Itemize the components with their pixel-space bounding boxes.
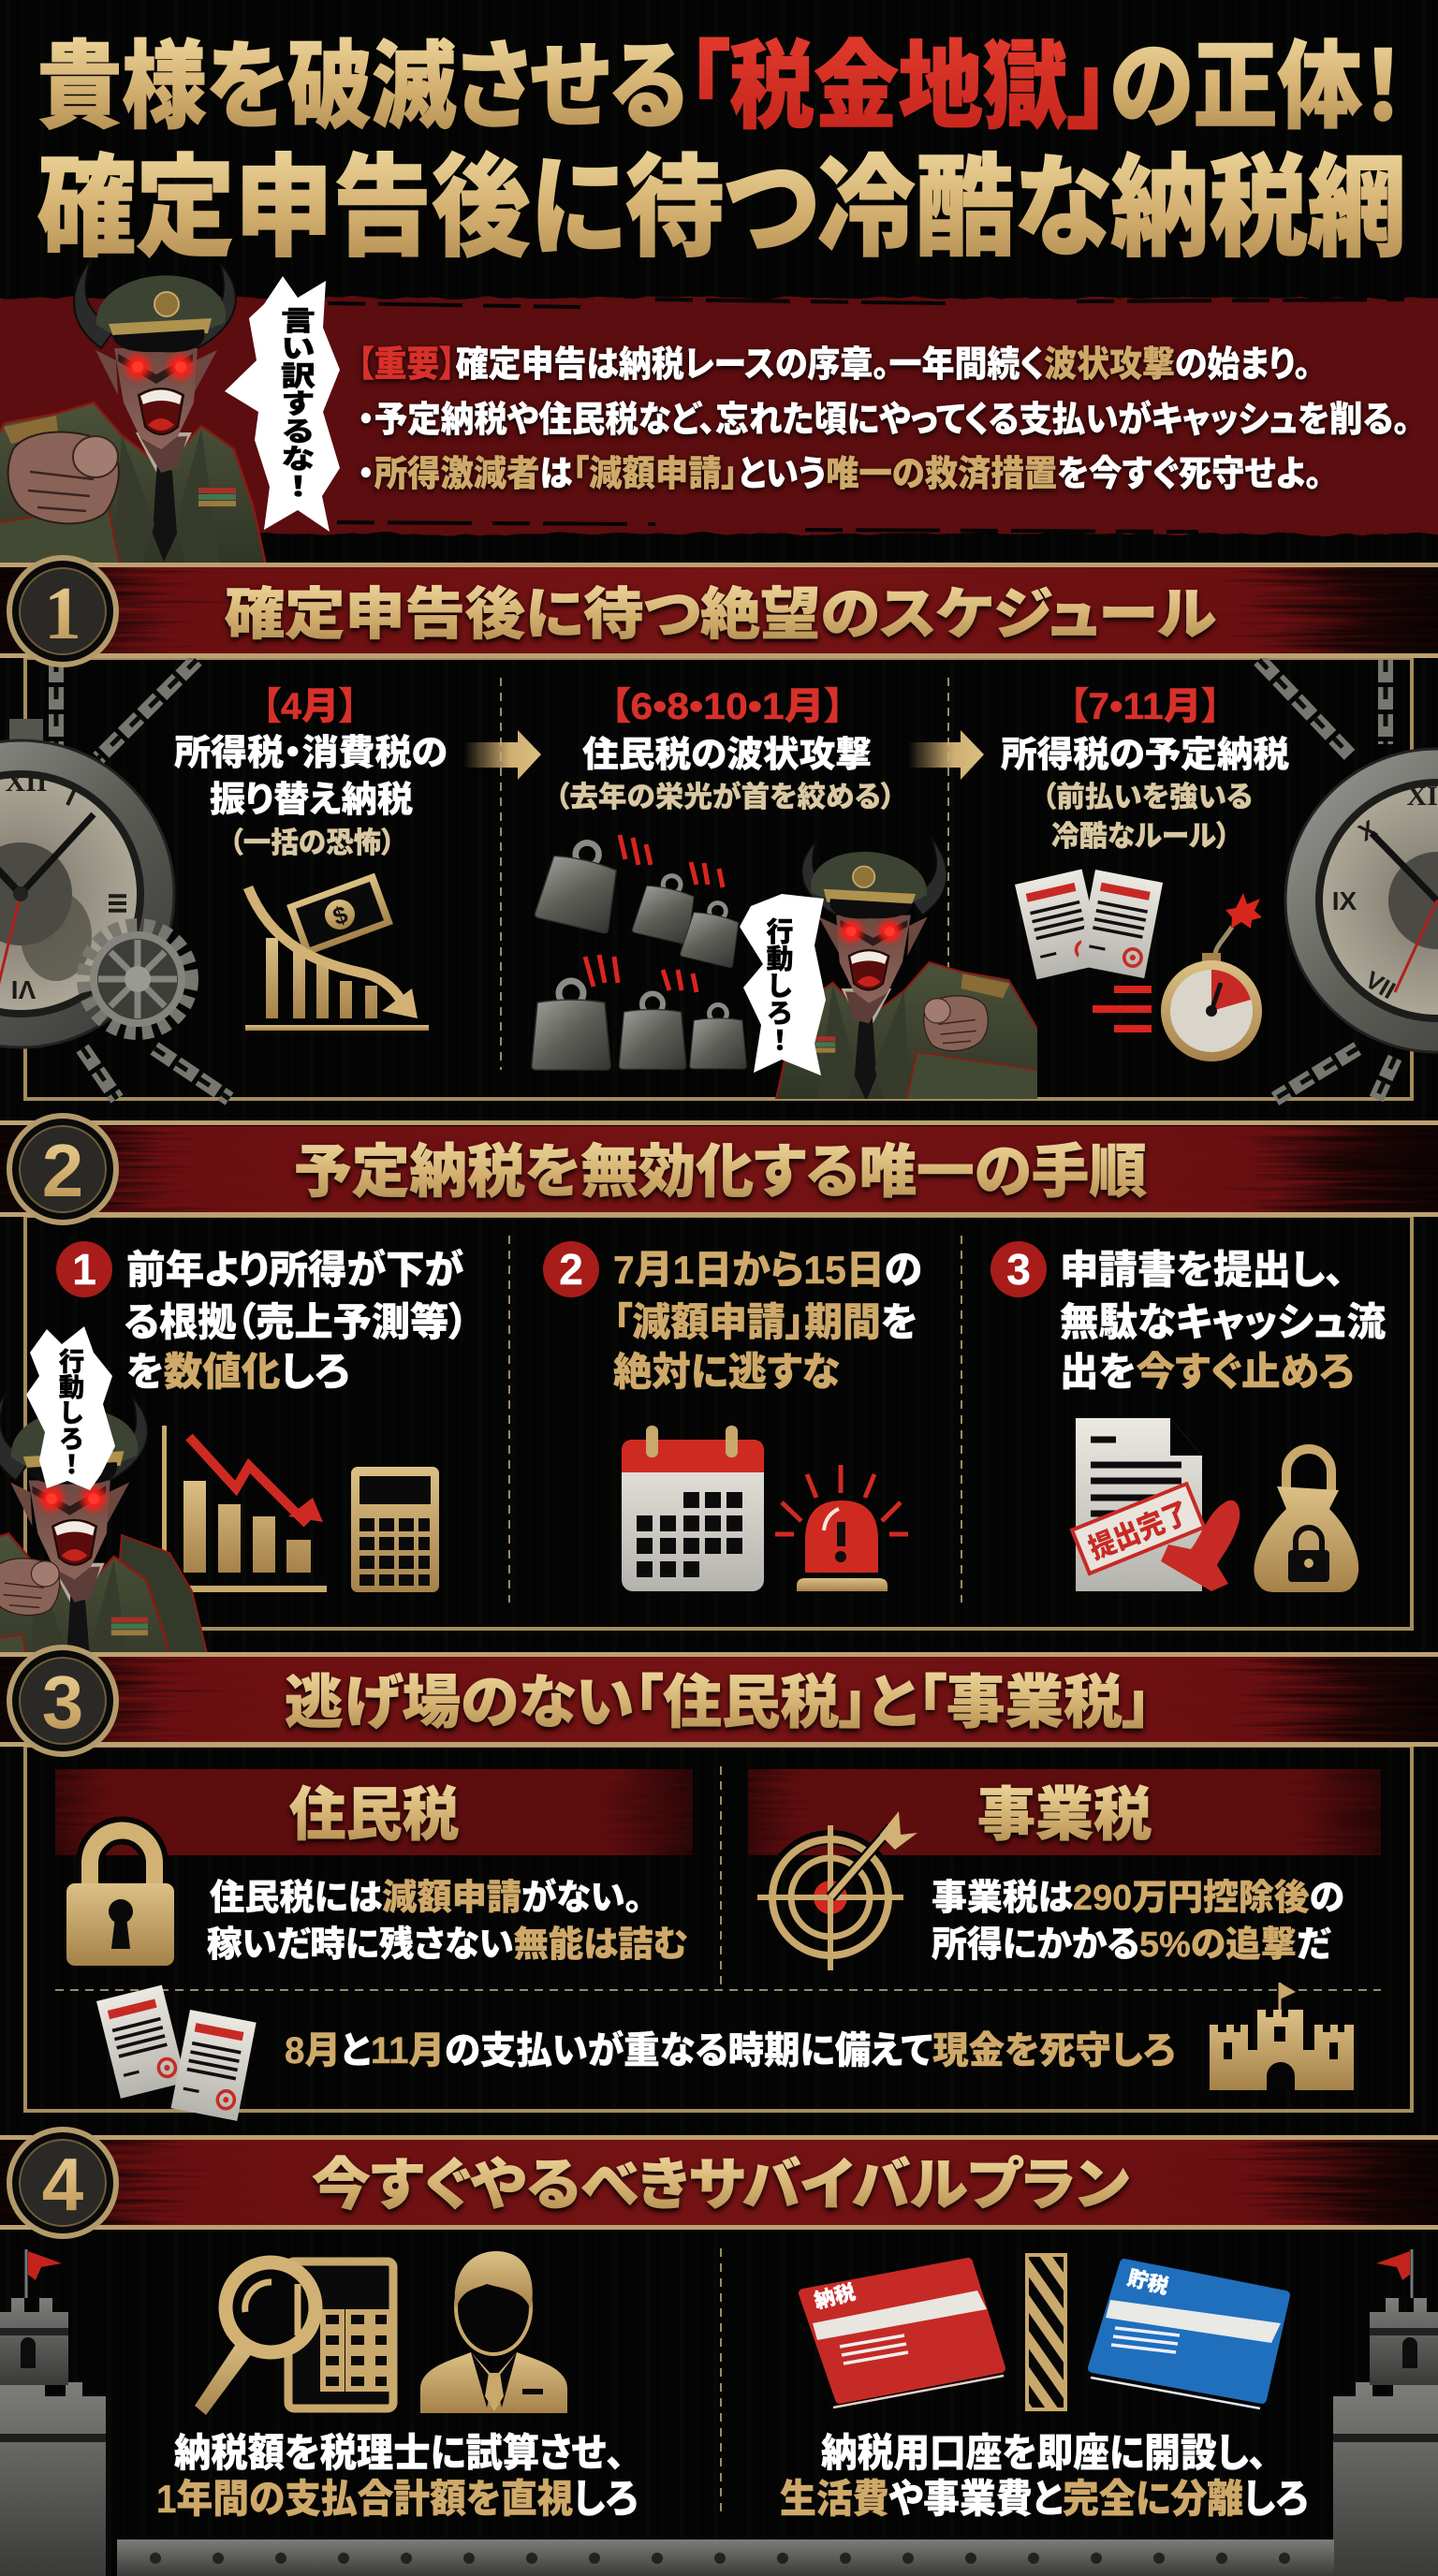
card: residence tax <box>42 1764 706 1966</box>
icon: castle <box>1210 1983 1354 2090</box>
illustration: right tower <box>1333 2249 1438 2576</box>
column: estimated tax: （前払いを強いる <box>1042 781 1253 813</box>
icon: locked money bag <box>1254 1449 1358 1592</box>
icon: tax documents <box>1015 869 1163 979</box>
card: residence tax: 稼いだ時に残さない無能は詰む <box>207 1925 688 1965</box>
speech bubble: 行動しろ left <box>26 1326 115 1490</box>
divider section 4 <box>720 2248 722 2516</box>
column: April lump sum: 【4月】 <box>262 686 358 727</box>
heading: 今すぐやるべきサバイバルプラン <box>312 2154 1129 2217</box>
icon: documents <box>96 1985 257 2121</box>
dividers section 3 <box>55 1766 1381 1990</box>
plan: separate tax account <box>780 2255 1308 2521</box>
section 1 header <box>0 558 1438 665</box>
step 1: る根拠（売上予測等） <box>124 1300 468 1344</box>
card: residence tax: 住民税には減額申請がない。 <box>210 1878 642 1918</box>
icon: bomb stopwatch <box>1093 893 1262 1061</box>
section 4 header <box>0 2130 1438 2236</box>
column: April lump sum <box>174 686 448 1031</box>
badge: number 2: 2 <box>42 1129 83 1212</box>
icon: red tax passbook <box>803 2262 1004 2408</box>
icon: submitted document with stamp <box>1072 1418 1240 1591</box>
icon: padlock <box>66 1831 174 1966</box>
panel: section 1 frame <box>25 658 1412 1099</box>
heading: 確定申告後に待つ絶望のスケジュール <box>225 583 1216 646</box>
card: business tax: 所得にかかる5%の追撃だ <box>932 1925 1331 1965</box>
icon: calendar <box>622 1426 764 1591</box>
text: intro lines <box>358 345 1410 494</box>
badge: number 1 <box>9 558 116 665</box>
badge: step 3: 3 <box>1006 1245 1031 1294</box>
base: riveted metal strip <box>117 2539 1334 2576</box>
card: business tax: 事業税は290万円控除後の <box>932 1879 1344 1918</box>
badge: number 3 <box>9 1647 116 1754</box>
illustration: left pocket watch with chains and gear <box>0 660 229 1099</box>
speech bubble: 言い訳するな: 言い訳するな！ <box>275 306 315 499</box>
panel: warning intro band <box>0 298 1438 534</box>
icon: siren <box>775 1465 908 1591</box>
icon: calculator <box>351 1467 439 1592</box>
step 1: を数値化しろ <box>126 1350 349 1394</box>
character: demon officer left <box>0 1392 208 1726</box>
step 3: 無駄なキャッシュ流 <box>1060 1300 1386 1344</box>
panel: section 2 frame <box>25 1216 1412 1629</box>
illustration: right pocket watch with chains: VII <box>1360 965 1401 1004</box>
text: intro lines: ・所得激減者は「減額申請」という唯一の救済措置を今すぐ死守せよ。 <box>358 455 1322 494</box>
arrow: step 2 to 3 <box>908 730 984 780</box>
badge: step 2 <box>543 1241 599 1297</box>
illustration: left pocket watch with chains and gear: XII <box>5 767 48 798</box>
column: April lump sum: （一括の恐怖） <box>229 827 395 859</box>
badge: number 4 <box>9 2130 116 2236</box>
illustration: left tower <box>0 2249 106 2576</box>
column: residence tax wave: 住民税の波状攻撃 <box>582 736 872 775</box>
icon: magnifier and calculator <box>195 2261 393 2415</box>
speech bubble: 言い訳するな <box>225 276 340 532</box>
section 4 towers <box>0 2249 1438 2576</box>
badge: step 1: 1 <box>72 1245 96 1294</box>
character: demon officer middle <box>769 837 1050 1134</box>
column: April lump sum: 振り替え納税 <box>210 781 413 820</box>
badge: number 4: 4 <box>42 2143 84 2226</box>
badge: number 1: 1 <box>44 573 81 655</box>
section 3 header <box>0 1647 1438 1754</box>
column: estimated tax: 【7•11月】 <box>1069 686 1221 727</box>
icon: red tax passbook: 納税 <box>812 2280 858 2313</box>
column: residence tax wave <box>532 686 895 1070</box>
illustration: right pocket watch with chains: X <box>1353 814 1382 847</box>
heading: 予定納税を無効化する唯一の手順 <box>294 1140 1147 1205</box>
icon: blue savings passbook <box>1091 2263 1285 2408</box>
badge: number 2 <box>9 1116 116 1222</box>
step 3 <box>990 1241 1386 1592</box>
icon: blue savings passbook: 貯税 <box>1125 2266 1171 2298</box>
step 2 <box>543 1241 922 1591</box>
step 1: 前年より所得が下が <box>126 1248 463 1292</box>
step 2: 「減額申請」期間を <box>613 1300 917 1344</box>
arrow: step 1 to 2 <box>463 730 541 780</box>
dividers section 1 <box>501 678 948 1070</box>
step 3: 申請書を提出し、 <box>1060 1248 1344 1292</box>
plan: accountant estimate: 納税額を税理士に試算させ、 <box>174 2431 624 2475</box>
step 3: 出を今すぐ止めろ <box>1060 1350 1354 1394</box>
title <box>37 34 1406 271</box>
illustration: right pocket watch with chains <box>1259 660 1438 1099</box>
column: estimated tax: 所得税の予定納税 <box>1001 736 1289 775</box>
plan: accountant estimate: 1年間の支払合計額を直視しろ <box>156 2477 638 2521</box>
badge: step 1 <box>56 1241 112 1297</box>
panel: section 3 frame <box>25 1746 1412 2111</box>
illustration: left pocket watch with chains and gear: VI <box>11 975 36 1004</box>
plan: separate tax account: 納税用口座を即座に開設し、 <box>821 2431 1267 2475</box>
icon: falling money chart: $ <box>329 900 352 931</box>
speech bubble: 行動しろ left: 行動しろ！ <box>54 1348 84 1477</box>
icon: falling money chart <box>245 873 429 1031</box>
illustration: right pocket watch with chains: IX <box>1332 886 1357 915</box>
heading: 事業税: 事業税 <box>977 1783 1152 1848</box>
note: prepare cash: 8月と11月の支払いが重なる時期に備えて現金を死守しろ <box>285 2029 1175 2071</box>
icon: striped divider <box>1027 2255 1065 2409</box>
icon: tax accountant <box>420 2251 567 2413</box>
step 2: 7月1日から15日の <box>613 1248 922 1292</box>
column: April lump sum: 所得税・消費税の <box>174 734 448 773</box>
step 1 <box>56 1241 468 1592</box>
step 2: 絶対に逃すな <box>613 1350 840 1394</box>
speech bubble: 行動しろ middle <box>740 894 826 1076</box>
column: residence tax wave: 【6•8•10•1月】 <box>610 686 844 727</box>
heading: 住民税: 住民税 <box>289 1783 459 1848</box>
card: business tax <box>735 1764 1394 1970</box>
icon: weights <box>532 835 746 1070</box>
heading: 逃げ場のない「住民税」と「事業税」 <box>285 1671 1152 1735</box>
illustration: left pocket watch with chains and gear: I <box>62 783 81 812</box>
plan: separate tax account: 生活費や事業費と完全に分離しろ <box>780 2477 1308 2521</box>
icon: submitted document with stamp: 提出完了 <box>1084 1496 1194 1566</box>
speech bubble: 行動しろ middle: 行動しろ！ <box>762 917 794 1053</box>
text: intro lines: 【重要】確定申告は納税レースの序章。一年間続く波状攻撃の始まり。 <box>358 345 1311 385</box>
column: residence tax wave: （去年の栄光が首を絞める） <box>555 781 895 813</box>
character: shouting demon officer top <box>0 258 273 599</box>
badge: step 2: 2 <box>559 1245 583 1294</box>
column: estimated tax <box>1001 686 1289 1061</box>
dividers section 2 <box>509 1236 961 1603</box>
illustration: left pocket watch with chains and gear: III <box>103 892 132 915</box>
badge: step 3 <box>990 1241 1047 1297</box>
icon: falling bar chart <box>162 1426 327 1592</box>
note: prepare cash <box>96 1983 1354 2121</box>
badge: number 3: 3 <box>42 1661 83 1744</box>
plan: accountant estimate <box>156 2251 638 2521</box>
icon: target <box>757 1811 917 1970</box>
title: 貴様を破滅させる「税金地獄」の正体！ <box>37 34 1404 140</box>
section 2 header <box>0 1116 1438 1222</box>
column: estimated tax: 冷酷なルール） <box>1051 820 1230 853</box>
